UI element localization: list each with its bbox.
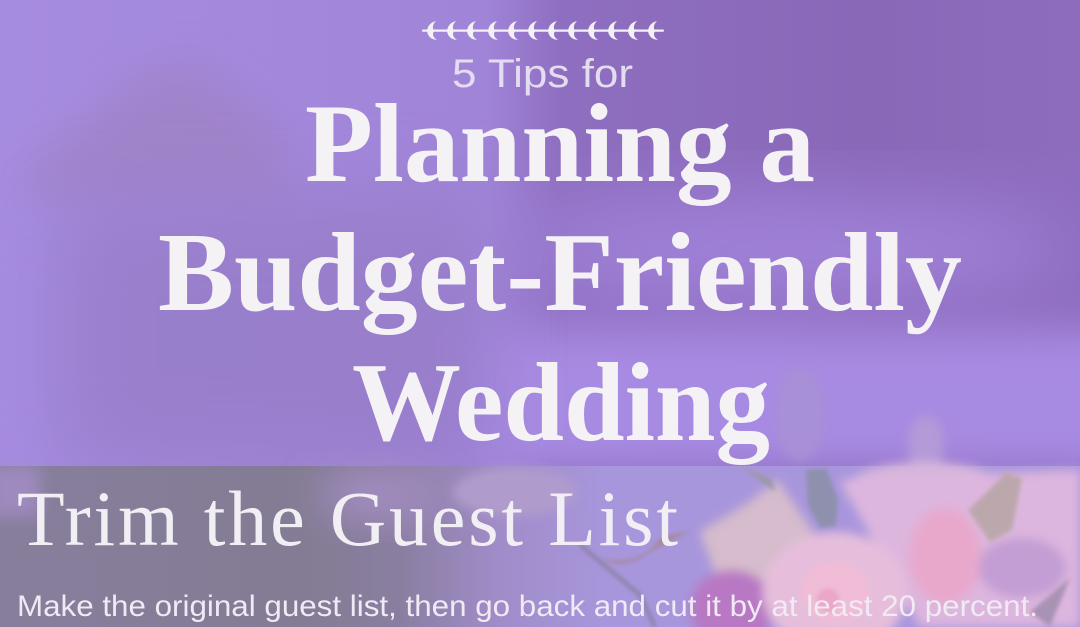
decorative laurel divider — [422, 21, 664, 40]
flower bouquet — [453, 369, 1080, 627]
section heading: Trim the Guest List — [17, 475, 678, 562]
main title: Budget-Friendly — [158, 211, 962, 335]
laurel leaves — [427, 21, 658, 40]
main title — [158, 82, 962, 465]
main title: Planning a — [305, 82, 815, 206]
bottom band — [0, 466, 1080, 627]
kicker: 5 Tips for: 5 Tips for — [452, 52, 633, 96]
section body text: Make the original guest list, then go back and cut it by at least 20 percent. — [17, 590, 1038, 623]
main title: Wedding — [352, 341, 770, 465]
